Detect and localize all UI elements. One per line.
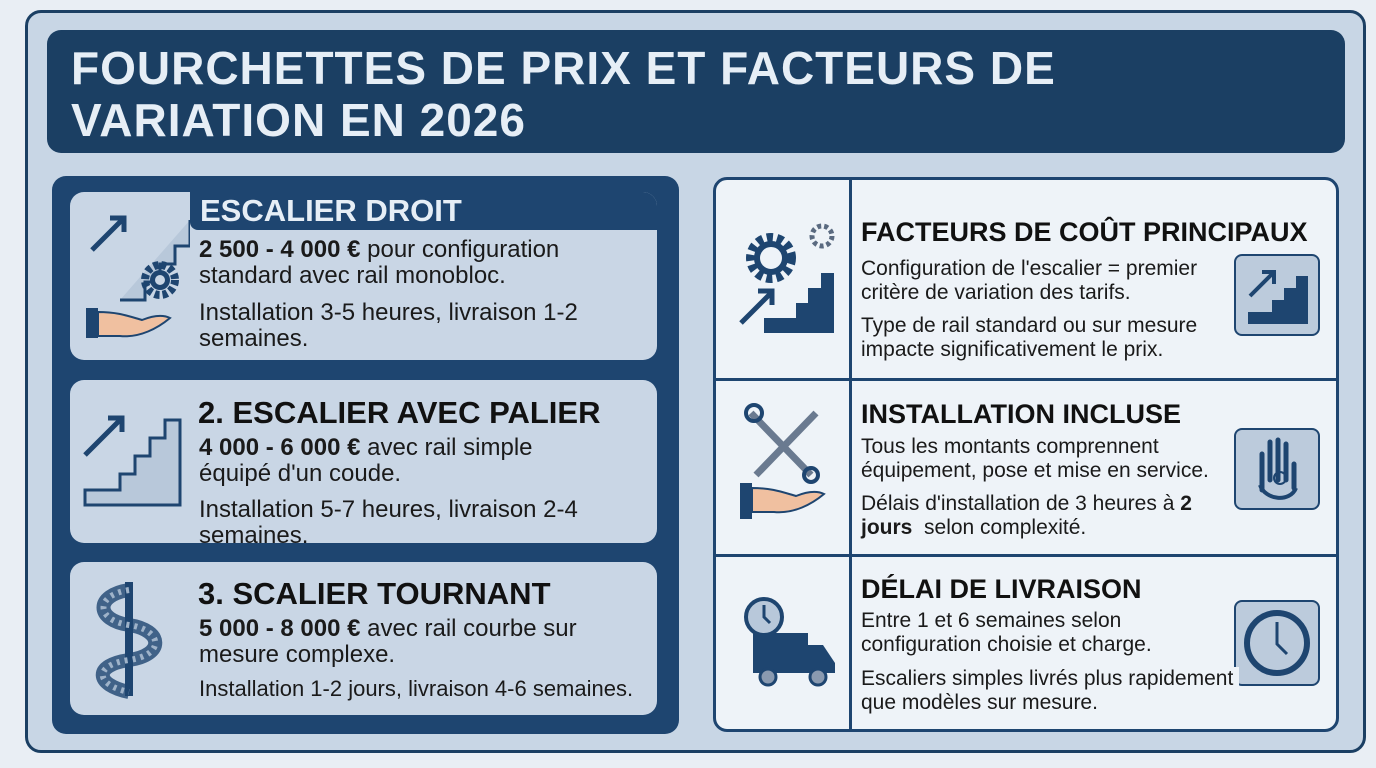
heading tab — [190, 192, 657, 230]
icon: truck clock — [744, 597, 835, 686]
title: VARIATION EN 2026 — [71, 94, 526, 146]
text: Installation 5-7 heures, livraison 2-4 — [199, 496, 578, 523]
icon: stairs landing — [83, 416, 182, 506]
text — [861, 257, 1197, 304]
text — [199, 434, 533, 487]
card: escalier avec palier — [70, 380, 657, 543]
text — [861, 314, 1197, 361]
divider — [716, 554, 1342, 557]
heading: ESCALIER DROIT — [200, 193, 462, 228]
panel: cost factors — [713, 177, 1339, 732]
icon box: clock — [1234, 600, 1320, 686]
panel: staircase price ranges — [52, 176, 679, 734]
text — [199, 496, 578, 543]
row: installation incluse — [740, 399, 1320, 539]
icon: tools hand — [740, 403, 826, 519]
text — [861, 435, 1209, 482]
divider vertical — [849, 180, 852, 735]
text: configuration choisie et charge. — [861, 633, 1152, 656]
icon: spiral stairs — [96, 582, 162, 699]
text: impacte significativement le prix. — [861, 338, 1163, 361]
text — [860, 492, 1192, 539]
text: standard avec rail monobloc. — [199, 262, 506, 289]
heading: FACTEURS DE COÛT PRINCIPAUX — [861, 217, 1308, 247]
text: équipement, pose et mise en service. — [861, 459, 1209, 482]
heading: 2. ESCALIER AVEC PALIER — [198, 395, 600, 430]
text: 4 000 - 6 000 € avec rail simple — [199, 434, 533, 461]
text: critère de variation des tarifs. — [861, 281, 1131, 304]
text: Type de rail standard ou sur mesure — [861, 314, 1197, 337]
heading: INSTALLATION INCLUSE — [861, 399, 1181, 429]
text: équipé d'un coude. — [199, 460, 401, 487]
text — [861, 609, 1152, 656]
text: Tous les montants comprennent — [861, 435, 1159, 458]
row: délai de livraison — [744, 574, 1320, 714]
text: Entre 1 et 6 semaines selon — [861, 609, 1121, 632]
text — [199, 236, 559, 289]
text: 5 000 - 8 000 € avec rail courbe sur — [199, 615, 577, 642]
text: que modèles sur mesure. — [861, 691, 1098, 714]
icon: stairs gear hand — [86, 216, 190, 338]
text: Délais d'installation de 3 heures à 2 — [861, 492, 1192, 515]
text: Installation 3-5 heures, livraison 1-2 — [199, 299, 578, 326]
text — [199, 615, 577, 668]
divider — [716, 378, 1342, 381]
heading: 3. SCALIER TOURNANT — [198, 576, 551, 611]
text — [199, 299, 578, 352]
icon box: hand accessibility — [1234, 428, 1320, 510]
row: facteurs de coût — [739, 216, 1320, 361]
title: FOURCHETTES DE PRIX ET FACTEURS DE — [71, 42, 1056, 94]
text — [861, 667, 1239, 715]
icon box: stairs — [1234, 254, 1320, 336]
card: escalier droit — [70, 192, 657, 360]
text: Configuration de l'escalier = premier — [861, 257, 1197, 280]
text: semaines. — [199, 325, 308, 352]
text: jours selon complexité. — [861, 516, 1086, 539]
text: Installation 1-2 jours, livraison 4-6 semaines. — [199, 676, 633, 701]
text: 2 500 - 4 000 € pour configuration — [199, 236, 559, 263]
icon: gears stairs — [739, 224, 834, 333]
text: mesure complexe. — [199, 641, 395, 668]
title — [47, 30, 1345, 153]
text: Escaliers simples livrés plus rapidement — [861, 667, 1233, 690]
heading: DÉLAI DE LIVRAISON — [861, 574, 1142, 604]
card: escalier tournant — [70, 562, 657, 715]
